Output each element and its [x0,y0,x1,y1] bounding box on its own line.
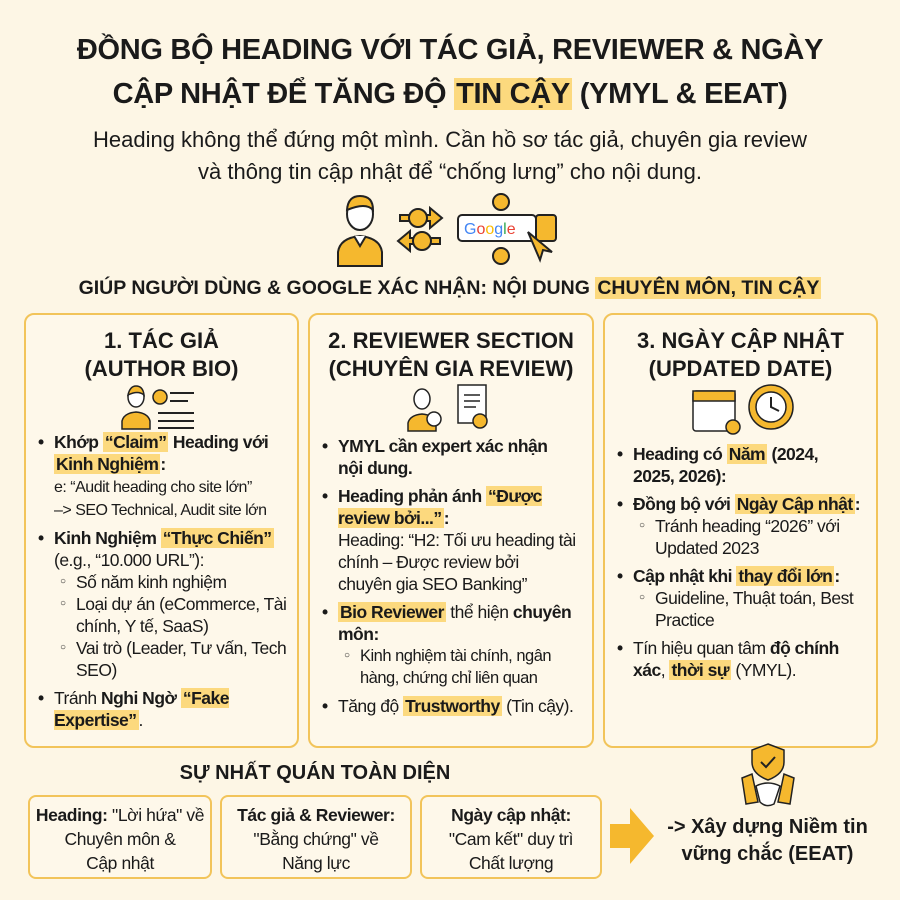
icon: user and google search [337,193,557,267]
bullet list: Loại dự án (eCommerce, Tài chính, Y tế, SaaS) [76,594,286,636]
box: heading: Cập nhật [86,853,154,873]
panel: reviewer [308,313,594,748]
subtitle: Heading không thể đứng một mình. Cần hồ sơ tác giả, chuyên gia review [93,127,807,152]
conclusion text: -> Xây dựng Niềm tin vững chắc (EEAT) [667,816,868,865]
box: author reviewer: "Bằng chứng" về [253,829,379,849]
box: heading: Heading: "Lời hứa" về Chuyên môn & [36,805,204,849]
box: author reviewer: Năng lực [282,853,350,873]
bullet list: Số năm kinh nghiệm [76,572,227,592]
box: updated [420,795,602,879]
bullet list: Khớp “Claim” Heading với Kinh Nghiệm: [54,432,268,474]
bullet list: Đồng bộ với Ngày Cập nhật: [633,494,860,514]
panel heading: (UPDATED DATE) [649,356,832,381]
bullet list: Kinh nghiệm tài chính, ngân hàng, chứng chỉ liên quan [360,647,551,687]
subtitle [93,127,807,184]
bullet list: Heading: “H2: Tối ưu heading tài chính – Được review bởi chuyên gia SEO Banking” [338,530,576,594]
bullet list: Heading có Năm (2024, 2025, 2026): [633,444,818,486]
box: updated: Ngày cập nhật: [451,805,571,825]
bullet list [618,444,860,680]
bullet list: Heading phản ánh “Được review bởi...”: [338,486,542,528]
bullet list [38,432,286,730]
box: author reviewer: Tác giả & Reviewer: [237,805,395,825]
bullet list: (e.g., “10.000 URL”): [54,550,204,570]
title [77,33,823,110]
panel heading [637,328,844,381]
icon: author bio [121,385,194,430]
bullet list: YMYL cần expert xác nhận nội dung. [338,436,547,478]
icon: reviewer [407,384,488,432]
bullet list: e: “Audit heading cho site lớn” [54,479,252,496]
bullet list [322,436,576,716]
bullet list: Guideline, Thuật toán, Best Practice [655,588,853,630]
title: CẬP NHẬT ĐỂ TĂNG ĐỘ TIN CẬY (YMYL & EEAT) [113,78,787,110]
panel heading: 1. TÁC GIẢ [104,328,219,353]
banner heading: GIÚP NGƯỜI DÙNG & GOOGLE XÁC NHẬN: NỘI DUNG CHUYÊN MÔN, TIN CẬY [79,277,819,299]
bullet list: Cập nhật khi thay đổi lớn: [633,566,840,586]
panel: updated date [603,313,878,748]
panel heading: 3. NGÀY CẬP NHẬT [637,328,844,353]
bottom heading: SỰ NHẤT QUÁN TOÀN DIỆN [180,762,450,784]
panel heading: (AUTHOR BIO) [84,356,238,381]
box: heading [28,795,212,879]
bullet list: Bio Reviewer thể hiện chuyên môn: [338,602,571,644]
bullet list: Tránh heading “2026” với Updated 2023 [655,516,840,558]
panel heading: (CHUYÊN GIA REVIEW) [329,356,573,381]
panel heading: 2. REVIEWER SECTION [328,328,574,353]
icon: user and google search: Google [464,221,516,238]
bullet list: Tránh Nghi Ngờ “Fake Expertise”. [54,688,229,730]
box: author reviewer [220,795,412,879]
box: updated: "Cam kết" duy trì [449,829,573,849]
bullet list: Tăng độ Trustworthy (Tin cậy). [338,696,573,716]
icon: calendar and clock [692,384,794,435]
subtitle: và thông tin cập nhật để “chống lưng” cho nội dung. [198,159,702,184]
bullet list: Tín hiệu quan tâm độ chính xác, thời sự (YMYL). [633,638,839,680]
panel heading [328,328,574,381]
title: ĐỒNG BỘ HEADING VỚI TÁC GIẢ, REVIEWER & NGÀY [77,34,823,66]
bullet list: Kinh Nghiệm “Thực Chiến” [54,528,272,548]
panel heading [84,328,238,381]
panel: author [24,313,299,748]
bullet list: Vai trò (Leader, Tư vấn, Tech SEO) [76,638,286,680]
icon: shield handshake [741,743,795,806]
arrow [610,808,654,864]
bullet list: –> SEO Technical, Audit site lớn [54,502,267,519]
box: updated: Chất lượng [469,853,553,873]
